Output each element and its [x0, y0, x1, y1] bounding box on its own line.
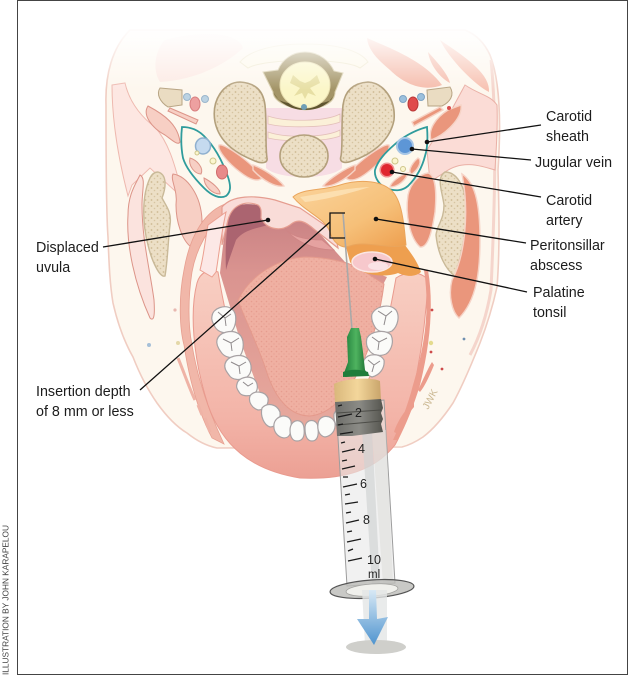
tan collar — [334, 379, 381, 403]
left lower strip lobes — [178, 358, 210, 432]
right cervical vertebra — [341, 82, 394, 162]
right jaw muscle — [407, 173, 436, 247]
top fade — [95, 22, 515, 90]
illustration: cross-section of head and neck — [95, 22, 515, 478]
label: peritonsillar abscess: Peritonsillar — [530, 238, 605, 254]
left neck muscles — [155, 34, 243, 82]
right side muscles — [430, 105, 461, 140]
left side muscles — [146, 106, 180, 143]
leader: palatine tonsil — [373, 257, 527, 292]
right fatty tissue — [427, 85, 497, 182]
leader: displaced uvula — [103, 218, 270, 247]
label: displaced uvula: Displaced — [36, 240, 99, 256]
plunger stem — [362, 590, 387, 645]
spinal canal — [263, 52, 343, 110]
syringe — [329, 213, 415, 654]
right mandible bone — [436, 172, 466, 276]
barrel gradation ticks — [338, 405, 362, 561]
label: displaced uvula: uvula — [36, 260, 70, 276]
vein and artery dots in masses — [147, 308, 465, 370]
spinal cord — [280, 62, 330, 110]
peritonsillar abscess — [293, 181, 406, 247]
label: insertion depth: Insertion depth — [36, 384, 131, 400]
mouth lip and gum — [193, 270, 428, 478]
left mandible bone — [144, 172, 170, 276]
label: jugular vein: Jugular vein — [535, 155, 612, 171]
left fatty tissue — [112, 83, 185, 200]
label: insertion depth: of 8 mm or less — [36, 404, 134, 420]
blue arrow — [357, 590, 388, 645]
abscess highlights — [300, 187, 370, 202]
right outer stripe — [470, 60, 495, 355]
left jugular vein — [196, 138, 210, 154]
right carotid sheath — [375, 127, 427, 190]
left outer lobe — [128, 175, 154, 319]
left carotid sheath — [181, 127, 230, 197]
abscess lower rim — [345, 238, 421, 276]
leader: carotid artery — [390, 170, 541, 197]
barrel scale numbers: 10 — [367, 553, 381, 567]
cream bands — [268, 114, 340, 141]
label: carotid artery: Carotid — [546, 193, 592, 209]
barrel scale numbers: 6 — [360, 477, 367, 491]
leader: jugular vein — [410, 147, 531, 160]
left prevertebral muscles — [219, 145, 284, 186]
right outer muscle — [450, 174, 480, 318]
plunger rod — [362, 430, 380, 585]
right prevertebral muscles — [323, 145, 389, 186]
pink prevertebral band — [266, 108, 342, 177]
posterior cream arc — [240, 44, 368, 68]
right jaw strip and lobes — [394, 362, 434, 434]
left jaw muscle — [172, 174, 202, 247]
central vertebral body — [280, 135, 328, 177]
leader: peritonsillar abscess — [374, 217, 526, 243]
mid vertebra small process left — [158, 88, 208, 124]
barrel scale numbers: 8 — [363, 513, 370, 527]
dark pharynx recess — [226, 204, 270, 270]
barrel scale numbers: ml — [368, 569, 380, 581]
barrel scale numbers: 4 — [358, 442, 365, 456]
left cervical vertebra — [214, 82, 267, 163]
label: carotid artery: artery — [546, 213, 583, 229]
barrel scale numbers — [355, 406, 381, 581]
rubber stopper — [335, 399, 383, 436]
left carotid artery — [216, 165, 228, 179]
needle — [343, 213, 352, 330]
tongue — [238, 257, 384, 416]
oral cavity — [220, 207, 387, 430]
right carotid artery — [380, 163, 394, 177]
syringe barrel — [336, 400, 395, 586]
label: palatine tonsil: Palatine — [533, 285, 585, 301]
barrel scale numbers: 2 — [355, 406, 362, 420]
label: peritonsillar abscess: abscess — [530, 258, 582, 274]
spinal canal dark lower — [273, 92, 335, 110]
head outer tissue — [106, 30, 500, 448]
label: carotid sheath: Carotid — [546, 109, 592, 125]
needle hub — [343, 328, 369, 377]
right inner stripe — [393, 270, 431, 440]
mid vertebra small process right — [400, 87, 452, 126]
right neck muscles — [367, 38, 489, 92]
leader: carotid sheath — [425, 125, 541, 144]
palatine tonsil — [352, 252, 392, 272]
palate fold — [285, 228, 334, 250]
left cheek stripe — [180, 203, 228, 444]
insertion depth bracket and leader — [140, 213, 345, 390]
barrel side highlight — [372, 430, 393, 584]
soft palate and uvula — [222, 197, 338, 248]
plunger base disk — [346, 640, 406, 654]
label: palatine tonsil: tonsil — [533, 305, 566, 321]
artist signature: JWK — [421, 387, 441, 411]
right jugular vein — [397, 138, 413, 154]
left tonsil pillar — [200, 212, 226, 277]
illustration credit: ILLUSTRATION BY JOHN KARAPELOU — [0, 525, 10, 675]
finger flange — [329, 577, 415, 601]
label: carotid sheath: sheath — [546, 129, 589, 145]
lower teeth — [212, 306, 398, 441]
